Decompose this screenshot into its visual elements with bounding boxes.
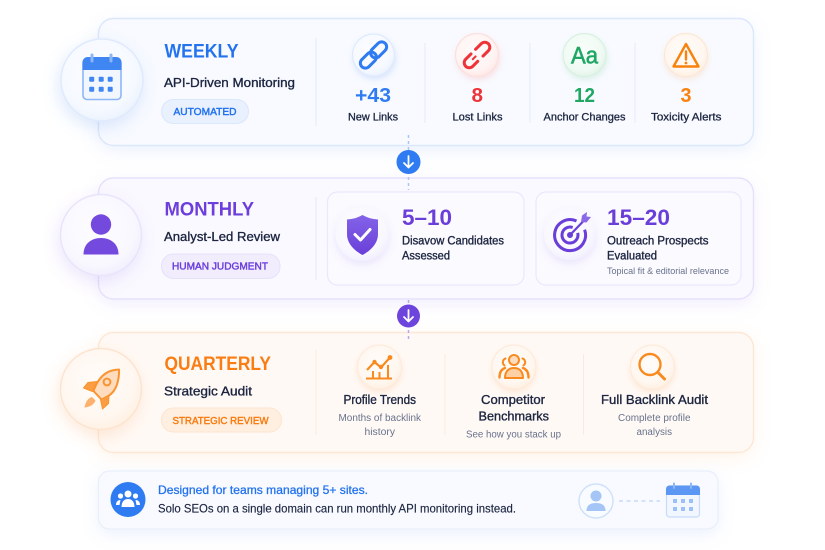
weekly pill: automated: AUTOMATED: [174, 106, 237, 118]
card: outreach prospects: Outreach Prospects: [607, 236, 709, 248]
footer illustration: person to calendar: [579, 484, 700, 518]
monthly badge icon: person: [60, 194, 142, 276]
metric: lost links: Lost Links: [452, 112, 503, 124]
item: full backlink audit: Complete profile: [618, 413, 691, 424]
metric: toxicity alerts: Toxicity Alerts: [651, 112, 722, 124]
quarterly pill: strategic review: [162, 408, 282, 432]
panel: monthly: [60, 178, 754, 299]
metric: new links: New Links: [348, 112, 398, 124]
panel: footer note: [98, 471, 718, 529]
item: competitor benchmarks: Competitor: [481, 393, 545, 407]
metric: toxicity alerts: 3: [680, 85, 692, 107]
card: disavow candidates: 5–10: [402, 205, 452, 230]
metric: toxicity alerts: [651, 34, 722, 124]
quarterly badge icon: rocket: [60, 348, 142, 430]
monthly subtitle: Analyst-Led Review: [164, 229, 281, 244]
arrow: monthly to quarterly: [397, 300, 420, 342]
monthly pill: human judgment: [162, 254, 280, 278]
item: competitor benchmarks: [466, 345, 561, 440]
quarterly subtitle: Strategic Audit: [164, 384, 252, 398]
quarterly heading: QUARTERLY: [164, 353, 271, 375]
item: competitor benchmarks: See how you stack up: [466, 430, 561, 440]
metric: anchor changes: 12: [574, 85, 595, 107]
card: disavow candidates: [328, 192, 524, 285]
monthly pill: human judgment: HUMAN JUDGMENT: [172, 261, 269, 273]
footer text: [158, 483, 516, 516]
item: competitor benchmarks: Benchmarks: [478, 410, 549, 424]
weekly heading: WEEKLY: [164, 40, 238, 62]
panel: weekly: [61, 18, 754, 146]
panel: quarterly: [60, 332, 754, 452]
item: profile trends: history: [364, 427, 395, 438]
item: profile trends: Months of backlink: [338, 413, 422, 424]
monthly heading: MONTHLY: [164, 198, 254, 220]
metric: new links: +43: [355, 85, 391, 107]
weekly pill: automated: [162, 100, 248, 124]
metric: lost links: [452, 34, 503, 124]
item: full backlink audit: analysis: [636, 427, 672, 438]
weekly badge icon: calendar: [61, 39, 143, 121]
metric: anchor changes: Anchor Changes: [544, 112, 626, 124]
card: disavow candidates: Assessed: [402, 250, 450, 262]
item: profile trends: Profile Trends: [344, 393, 416, 407]
card: outreach prospects: 15–20: [607, 205, 670, 230]
card: outreach prospects: [536, 192, 741, 285]
item: full backlink audit: [601, 345, 709, 438]
metric: lost links: 8: [472, 85, 483, 107]
arrow: weekly to monthly: [396, 135, 420, 190]
card: outreach prospects: Topical fit & editorial relevance: [607, 266, 729, 277]
card: outreach prospects: Evaluated: [607, 250, 657, 262]
metric: new links: [348, 34, 398, 124]
metric: anchor changes: Aa: [571, 42, 599, 70]
item: full backlink audit: Full Backlink Audit: [601, 393, 709, 407]
footer text: Designed for teams managing 5+ sites.: [158, 483, 368, 497]
footer icon: team: [110, 482, 146, 517]
weekly subtitle: API-Driven Monitoring: [164, 75, 295, 90]
quarterly pill: strategic review: STRATEGIC REVIEW: [172, 415, 269, 427]
metric: anchor changes: [544, 34, 626, 124]
item: profile trends: [338, 345, 422, 438]
footer text: Solo SEOs on a single domain can run monthly API monitoring instead.: [158, 502, 516, 516]
card: disavow candidates: Disavow Candidates: [402, 236, 504, 248]
